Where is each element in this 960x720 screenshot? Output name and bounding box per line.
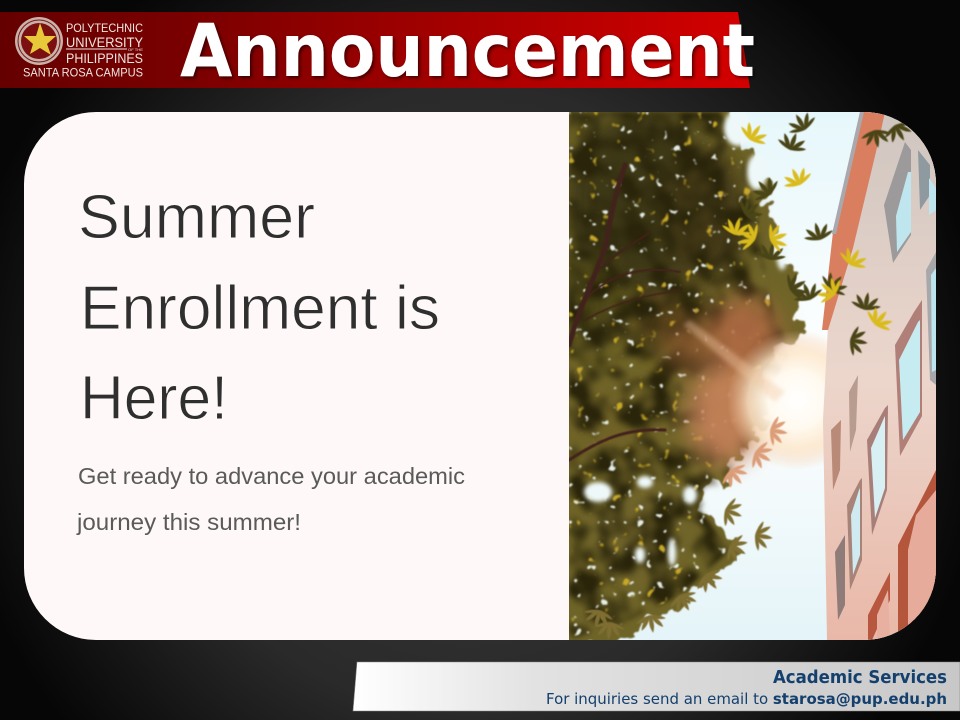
footer contact text: For inquiries send an email to starosa@pup.edu.ph	[546, 690, 947, 708]
header banner	[0, 9, 755, 94]
panel: announcement card	[24, 95, 936, 650]
building	[822, 112, 936, 640]
branches	[569, 165, 680, 460]
title: Announcement	[180, 9, 755, 94]
sun glow	[730, 332, 827, 468]
photo: tree and building in sunlight	[569, 112, 936, 640]
logo text: OF THE	[128, 48, 144, 52]
yellow leaves	[721, 117, 898, 335]
logo text: POLYTECHNIC	[66, 21, 143, 35]
heading: Summer	[78, 183, 315, 252]
subheading text	[76, 463, 465, 535]
olive lower leaves	[581, 496, 775, 641]
logo text: UNIVERSITY	[66, 35, 143, 50]
banner: red ribbon	[0, 12, 750, 88]
sunlit orange foliage	[665, 297, 780, 465]
icon: university seal	[15, 17, 63, 65]
heading: Here!	[80, 364, 228, 433]
subheading text: Get ready to advance your academic	[78, 463, 465, 489]
heading	[78, 183, 440, 433]
heading: Enrollment is	[80, 274, 440, 343]
pale sunlit leaves	[722, 416, 788, 488]
lens flare streak	[683, 320, 785, 402]
footer panel	[353, 662, 960, 711]
foliage texture	[569, 112, 790, 640]
canopy shading	[569, 112, 764, 356]
logo text	[23, 21, 144, 80]
tree canopy mass	[569, 112, 808, 640]
logo text: SANTA ROSA CAMPUS	[23, 66, 143, 80]
card text panel	[24, 112, 936, 640]
dark leaves	[735, 107, 917, 358]
subheading text: journey this summer!	[76, 509, 301, 535]
logo text: PHILIPPINES	[66, 51, 143, 66]
footer heading: Academic Services	[773, 667, 947, 688]
footer bar	[353, 662, 960, 711]
sky gaps	[584, 110, 788, 566]
